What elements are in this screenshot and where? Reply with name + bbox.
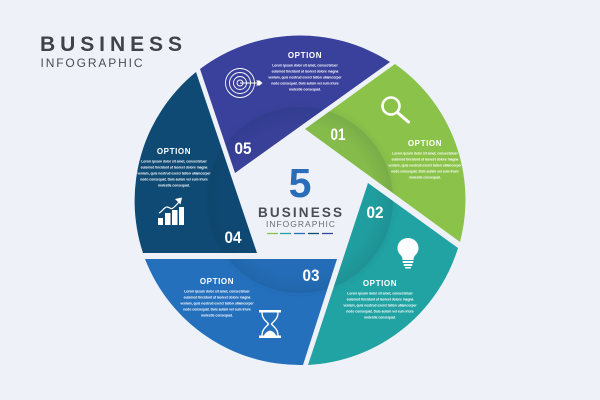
- option text 02: nodo consequat. Duis autem vel eum iriure: [346, 310, 414, 314]
- option text 01: nodo consequat. Duis autem vel eum iriure: [391, 170, 459, 174]
- option text 01: molestie consequat.: [409, 176, 441, 180]
- option text 03: [180, 277, 254, 318]
- option text 01: euismod tincidunt ut laoreet dolore magna: [392, 158, 458, 162]
- panel: segment 01: [305, 64, 465, 242]
- option text 03: nodo consequat. Duis autem vel eum iriure: [183, 308, 251, 312]
- option text 05: molestie consequat.: [289, 88, 321, 92]
- title: [40, 33, 182, 70]
- option text 04: veniam, quis nostrud exerci tation ullamcorper: [137, 172, 211, 176]
- option text 04: euismod tincidunt ut laoreet dolore magna: [141, 166, 207, 170]
- option text 03: molestie consequat.: [201, 314, 233, 318]
- option text 02: Lorem ipsum dolor sit amet, consectetuer: [347, 292, 414, 296]
- icon: growth chart: [158, 198, 184, 225]
- panel: segment 02: [308, 183, 458, 365]
- option text 01: Lorem ipsum dolor sit amet, consectetuer: [392, 152, 459, 156]
- option text 03: Lorem ipsum dolor sit amet, consectetuer: [184, 290, 251, 294]
- number 03: 03: [302, 267, 320, 285]
- option text 02: veniam, quis nostrud exerci tation ullamcorper: [343, 304, 417, 308]
- number 05: 05: [234, 140, 252, 158]
- panel: segment 03: [145, 259, 337, 365]
- option text 01: OPTION: [408, 139, 442, 148]
- option text 04: Lorem ipsum dolor sit amet, consectetuer: [141, 160, 208, 164]
- center colour dashes: [267, 232, 333, 234]
- option text 05: euismod tincidunt ut laoreet dolore magna: [272, 70, 338, 74]
- option text 05: veniam, quis nostrud exerci tation ullamcorper: [268, 76, 342, 80]
- option text 01: [388, 139, 462, 180]
- option text 03: veniam, quis nostrud exerci tation ullamcorper: [180, 302, 254, 306]
- number 04: 04: [224, 229, 242, 247]
- option text 05: OPTION: [288, 51, 322, 60]
- icon: light bulb: [398, 238, 418, 268]
- number 02: 02: [366, 204, 384, 222]
- option text 02: euismod tincidunt ut laoreet dolore magna: [347, 298, 413, 302]
- option text 04: nodo consequat. Duis autem vel eum iriure: [140, 178, 208, 182]
- option text 05: nodo consequat. Duis autem vel eum iriure: [271, 82, 339, 86]
- option text 02: OPTION: [363, 279, 397, 288]
- center number: 5: [289, 160, 311, 206]
- number 01: 01: [330, 126, 346, 144]
- option text 03: OPTION: [200, 277, 234, 286]
- option text 04: OPTION: [157, 147, 191, 156]
- icon: hourglass: [259, 310, 281, 338]
- option text 04: [137, 147, 211, 188]
- panel: segment 05: [200, 35, 390, 173]
- option text 01: veniam, quis nostrud exerci tation ullamcorper: [388, 164, 462, 168]
- inner circle shadow: [222, 107, 393, 293]
- center heading: INFOGRAPHIC: [266, 219, 335, 229]
- center heading: BUSINESS: [258, 205, 342, 220]
- option text 04: molestie consequat.: [158, 184, 190, 188]
- title: BUSINESS: [40, 33, 182, 56]
- option text 05: Lorem ipsum dolor sit amet, consectetuer: [272, 64, 339, 68]
- icon: target: [226, 68, 262, 98]
- center heading: [258, 205, 342, 229]
- option text 03: euismod tincidunt ut laoreet dolore magna: [184, 296, 250, 300]
- option text 02: molestie consequat.: [364, 316, 396, 320]
- option text 05: [268, 51, 342, 92]
- option text 02: [343, 279, 417, 320]
- panel: segment 04: [135, 72, 257, 253]
- icon: magnifier: [382, 98, 408, 122]
- title: INFOGRAPHIC: [40, 56, 143, 70]
